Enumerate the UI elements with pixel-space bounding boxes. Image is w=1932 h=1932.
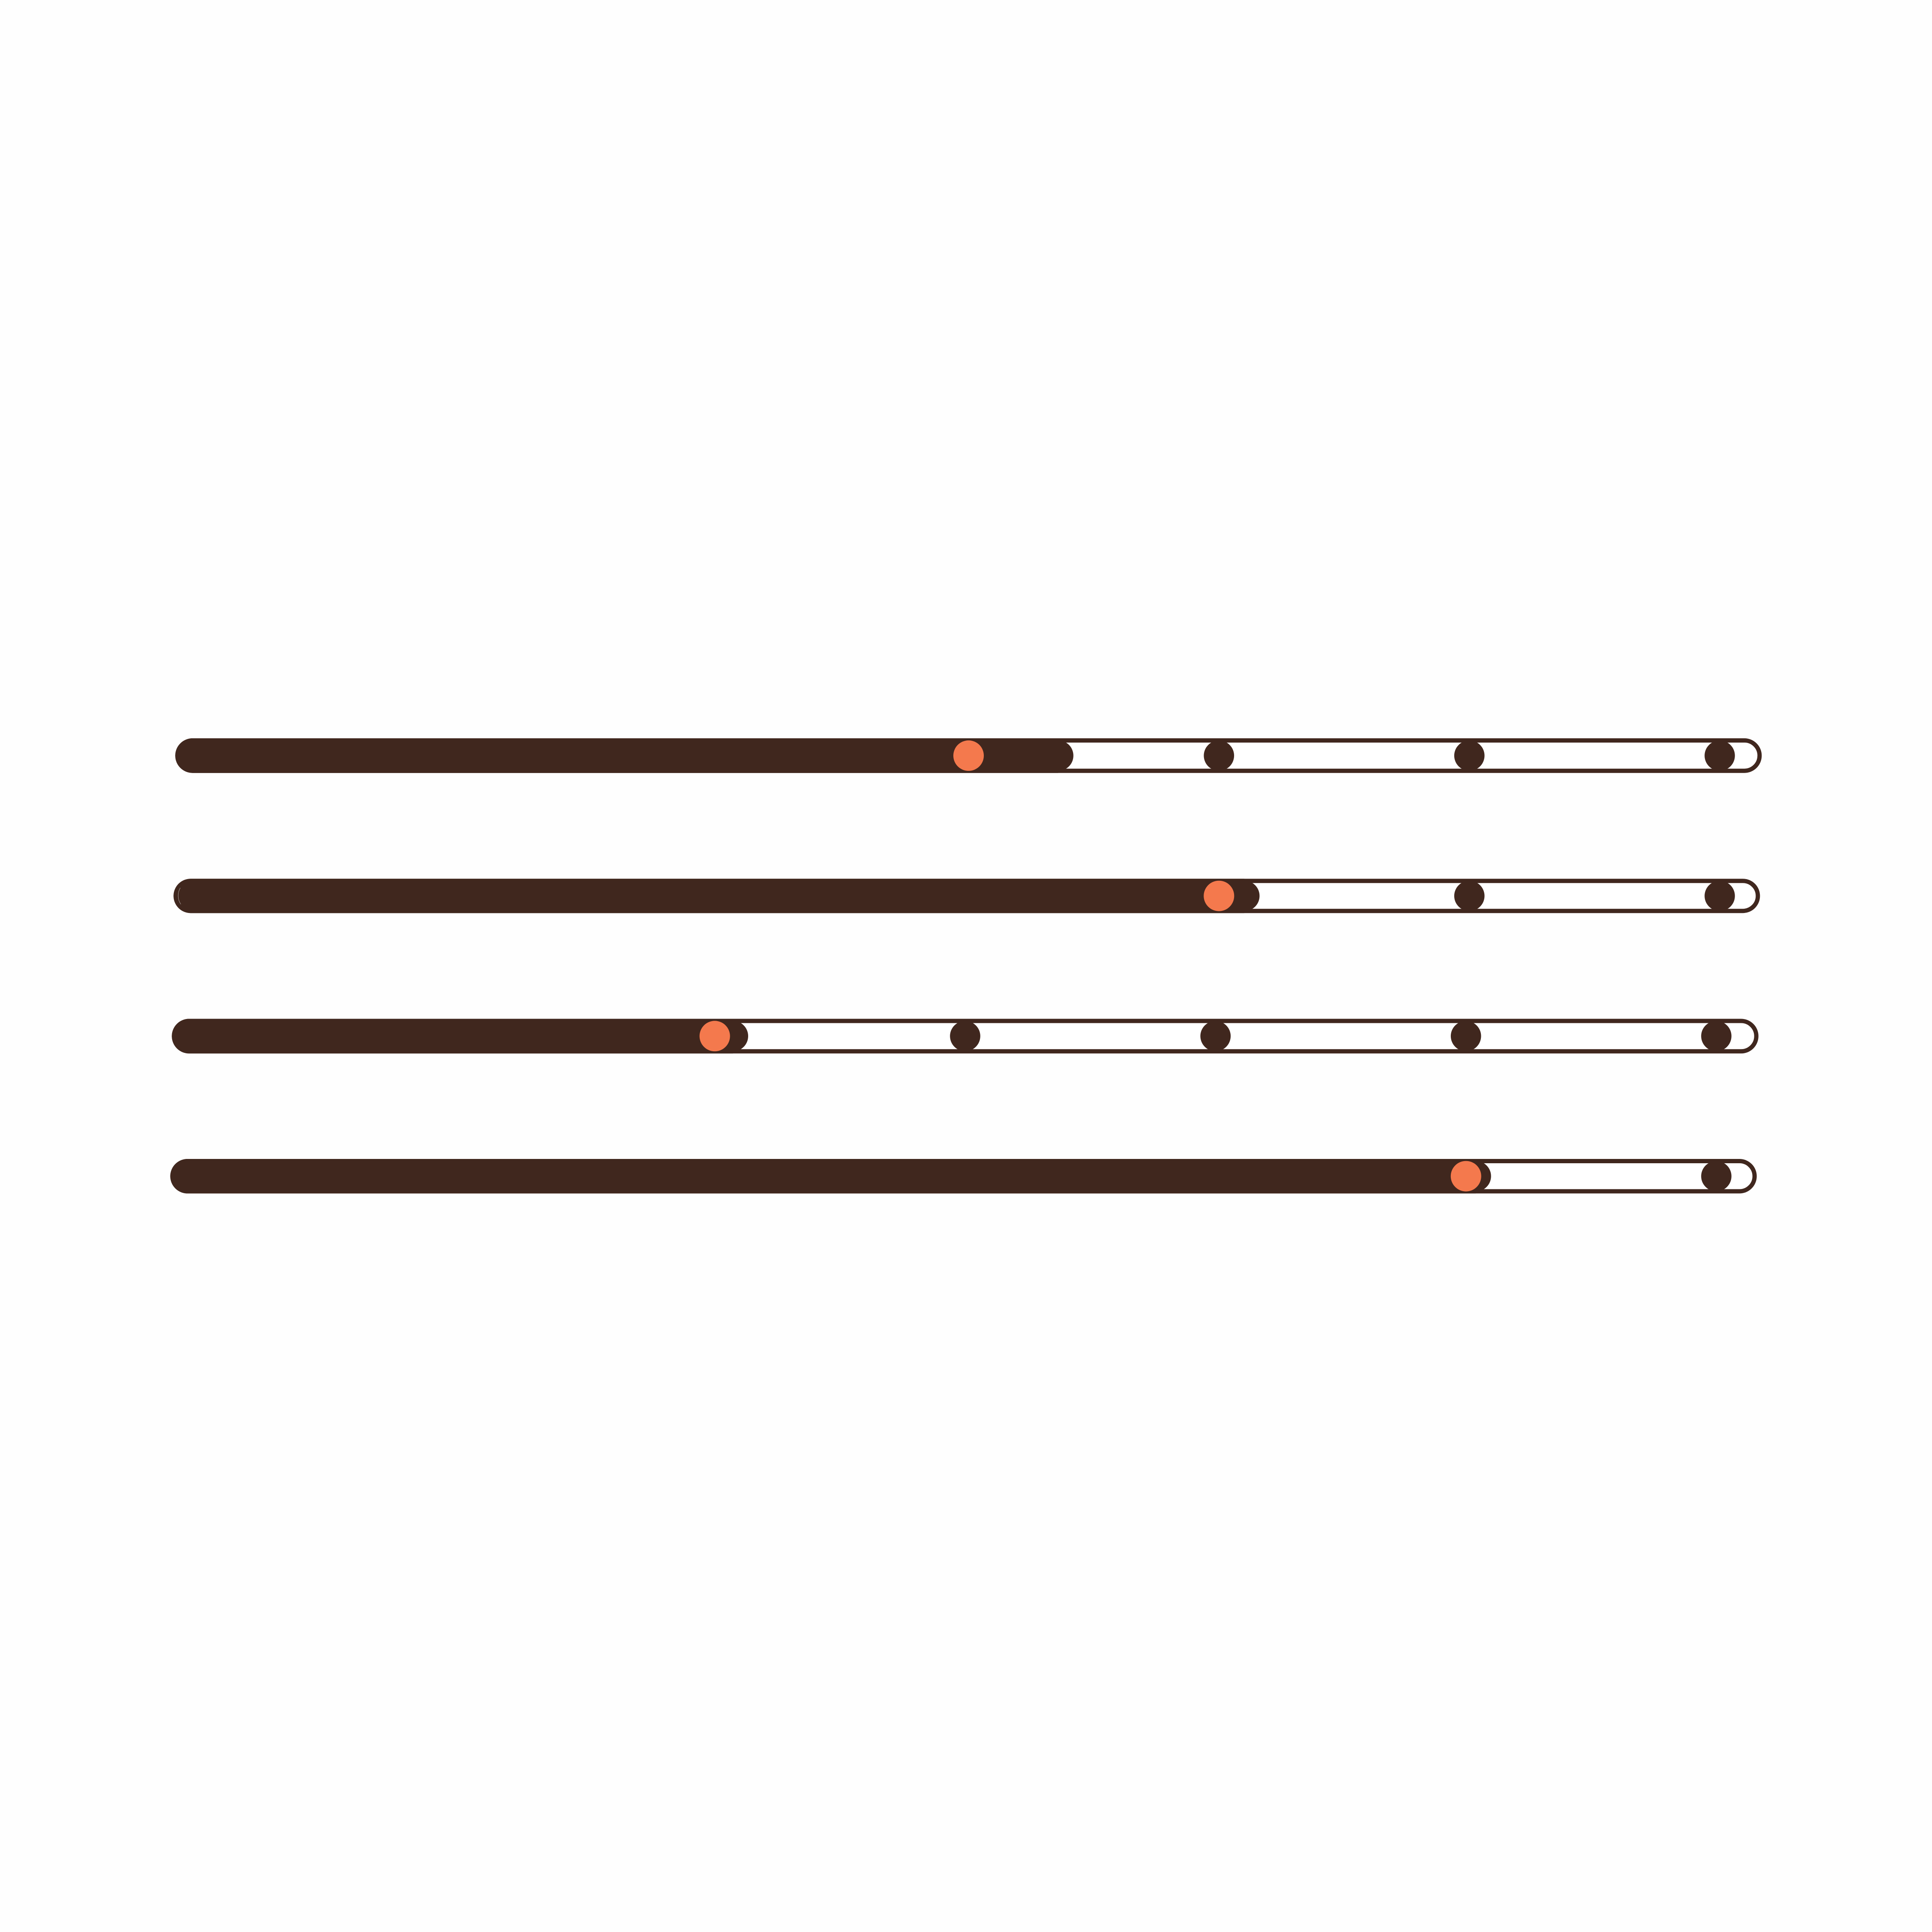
filled bar 2 xyxy=(173,879,1259,913)
current position marker of track 3 xyxy=(700,1021,730,1051)
step marker 5 of track 4 xyxy=(1701,1161,1732,1192)
current position marker of track 4 xyxy=(1451,1161,1481,1192)
step marker 3 of track 3 xyxy=(1200,1021,1231,1051)
panel: progress track 3 xyxy=(172,1019,1756,1053)
step marker 2 of track 3 xyxy=(950,1021,980,1051)
step marker 5 of track 3 xyxy=(1701,1021,1732,1051)
step marker 3 of track 1 xyxy=(1454,740,1484,771)
track outline 4 xyxy=(173,1161,1755,1191)
current position marker of track 1 xyxy=(953,740,984,771)
track outline 1 xyxy=(177,740,1759,771)
current position marker of track 2 xyxy=(1204,881,1234,911)
panel: progress track 2 xyxy=(173,879,1758,913)
filled bar 3 xyxy=(172,1019,748,1053)
step marker 2 of track 1 xyxy=(1204,740,1234,771)
step marker 4 of track 2 xyxy=(1705,881,1735,911)
step marker 4 of track 3 xyxy=(1451,1021,1481,1051)
step marker 4 of track 1 xyxy=(1705,740,1735,771)
panel: progress track 4 xyxy=(170,1159,1755,1193)
sliver of track interior at left cap of bar 2 xyxy=(178,888,181,904)
track outline 2 xyxy=(176,881,1758,911)
filled bar 1 xyxy=(175,738,1074,773)
track outline 3 xyxy=(174,1021,1756,1051)
panel: progress track 1 xyxy=(175,738,1759,773)
filled bar 4 xyxy=(170,1159,1491,1193)
step marker 3 of track 2 xyxy=(1454,881,1484,911)
